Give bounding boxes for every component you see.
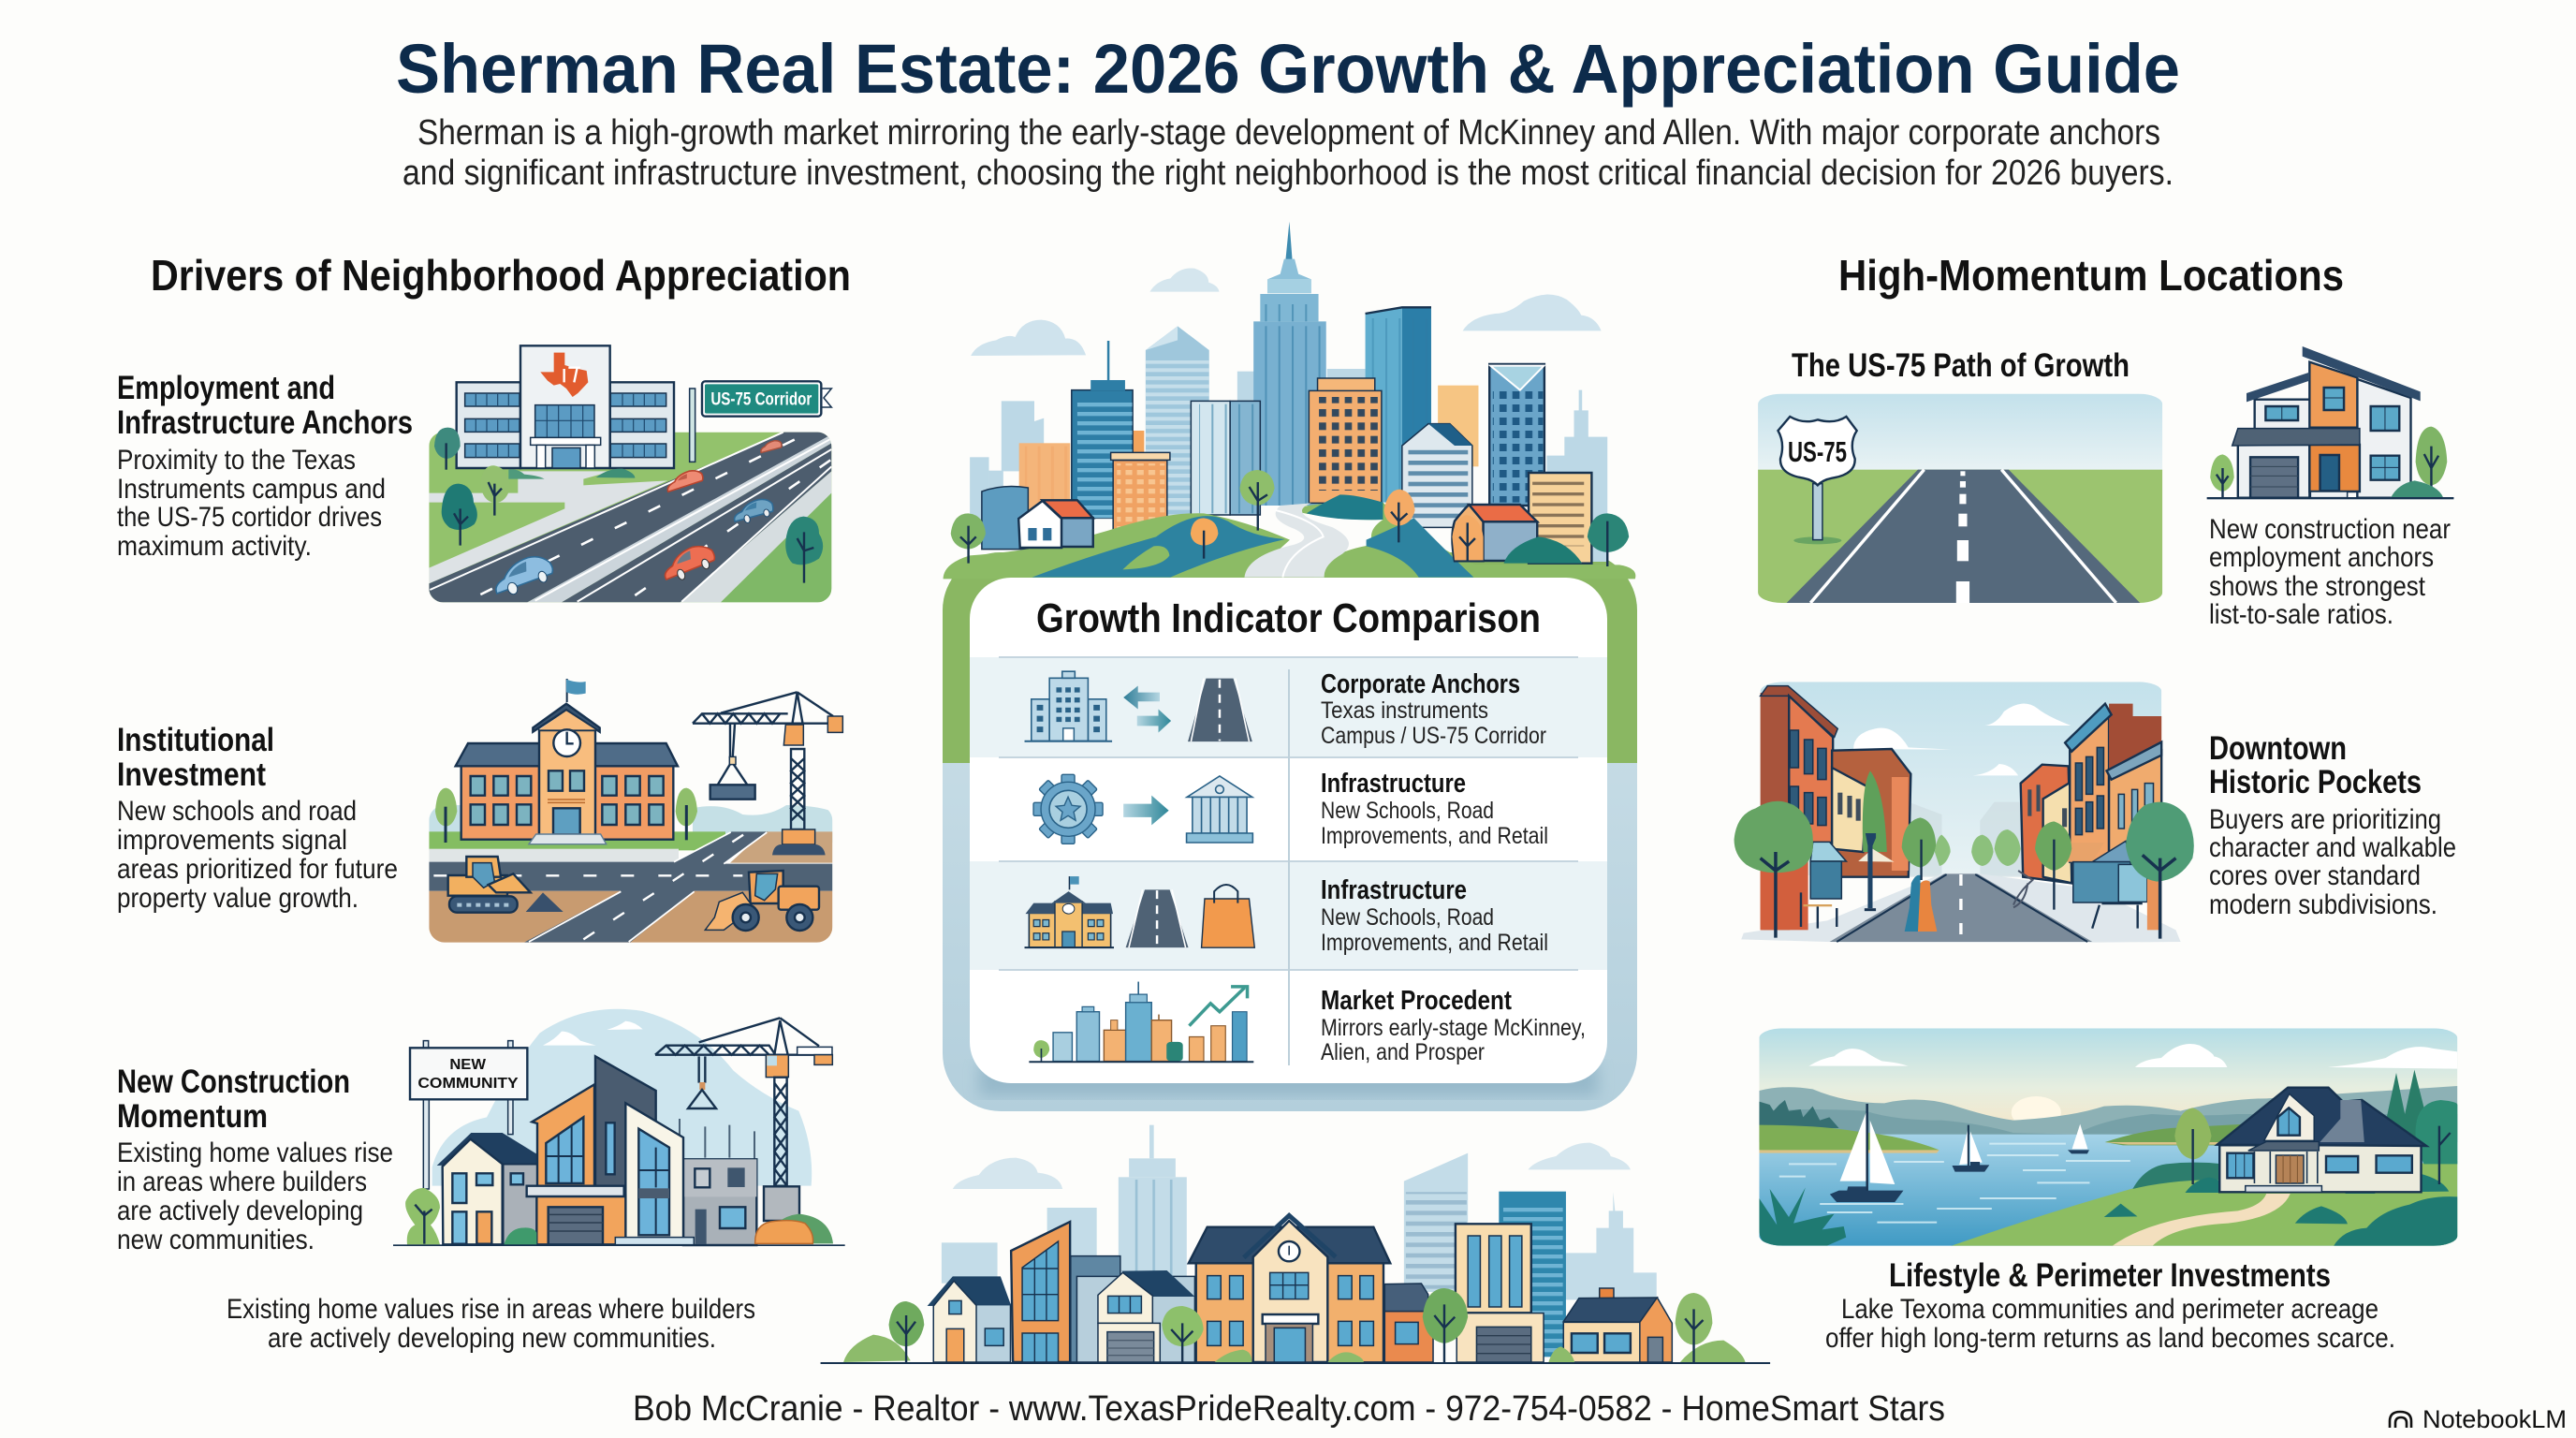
illustration: modern house xyxy=(2207,346,2453,499)
illustration: neighbourhood street xyxy=(821,1125,1770,1364)
row text: infrastructure: Infrastructure xyxy=(1321,769,1466,799)
text block: new construction momentum: New Construction xyxy=(117,1064,350,1100)
text block: lifestyle and perimeter investments: Lake Texoma communities and perimeter acreage xyxy=(1841,1294,2378,1325)
text block: employment anchors: maximum activity. xyxy=(117,531,312,562)
text block: new construction list-to-sale: shows the strongest xyxy=(2209,571,2426,602)
text block: lifestyle and perimeter investments xyxy=(1825,1257,2395,1354)
text block: institutional investment: areas prioritized for future xyxy=(117,854,398,885)
text block: employment anchors: the US-75 cortidor drives xyxy=(117,502,382,533)
text block: employment anchors: Proximity to the Texas xyxy=(117,445,356,476)
illustration: campus and highway: US-75 Corridor xyxy=(710,390,812,410)
text block: institutional investment: Investment xyxy=(117,756,266,793)
text block: US-75 heading: The US-75 Path of Growth xyxy=(1792,347,2130,384)
text block: new construction momentum: are actively developing xyxy=(117,1196,363,1226)
title: Sherman Real Estate: 2026 Growth & Appreciation Guide xyxy=(396,30,2180,108)
text block: new construction momentum xyxy=(117,1064,393,1255)
text block: downtown historic pockets: Historic Pockets xyxy=(2209,764,2422,800)
intro paragraph xyxy=(402,113,2174,193)
row text: corporate anchors xyxy=(1321,669,1546,749)
text block: institutional investment: property value growth. xyxy=(117,883,359,914)
bottom-left caption: are actively developing new communities. xyxy=(268,1323,716,1354)
illustration: lake perimeter xyxy=(1759,1028,2457,1248)
text block: new construction momentum: Momentum xyxy=(117,1098,268,1135)
text block: institutional investment: New schools and road xyxy=(117,796,357,827)
text block: new construction momentum: in areas where builders xyxy=(117,1167,367,1197)
illustration: city skyline xyxy=(944,222,1635,579)
heading: high-momentum locations: High-Momentum Locations xyxy=(1838,251,2344,300)
text block: lifestyle and perimeter investments: offer high long-term returns as land becomes scarce. xyxy=(1825,1323,2395,1354)
text block: employment anchors: Infrastructure Anchors xyxy=(117,404,413,441)
row text: infrastructure: Improvements, and Retail xyxy=(1321,823,1548,849)
row text: corporate anchors: Texas instruments xyxy=(1321,697,1488,724)
text block: institutional investment: improvements signal xyxy=(117,825,347,856)
icon: office and road xyxy=(1025,671,1252,741)
text block: downtown historic pockets: Downtown xyxy=(2209,730,2347,767)
bottom-left caption xyxy=(227,1294,755,1354)
text block: new construction list-to-sale: employment anchors xyxy=(2209,542,2434,573)
text block: employment anchors xyxy=(117,370,413,562)
text block: downtown historic pockets xyxy=(2209,730,2456,920)
illustration: new community construction: NEW xyxy=(449,1057,487,1073)
text block: institutional investment xyxy=(117,722,398,914)
text block: new construction list-to-sale: list-to-sale ratios. xyxy=(2209,599,2393,630)
icon: school, road and shopping bag xyxy=(1025,876,1254,947)
text block: downtown historic pockets: cores over standard xyxy=(2209,860,2421,891)
text block: new construction list-to-sale: New construction near xyxy=(2209,514,2451,545)
illustration: school and road works xyxy=(429,679,842,944)
text block: new construction list-to-sale xyxy=(2209,514,2451,630)
illustration: US-75 road xyxy=(1758,394,2162,604)
row text: infrastructure: New Schools, Road xyxy=(1321,798,1494,824)
panel frame behind comparison card xyxy=(943,552,1637,1111)
illustration: downtown street xyxy=(1734,682,2194,943)
NotebookLM watermark: NotebookLM xyxy=(2422,1405,2567,1433)
row text: market precedent: Alien, and Prosper xyxy=(1321,1039,1485,1065)
icon: skyline and growth chart xyxy=(1029,982,1253,1062)
row icons xyxy=(1025,671,1254,1062)
row text: infrastructure repeat: Improvements, and Retail xyxy=(1321,930,1548,956)
text block: downtown historic pockets: modern subdivisions. xyxy=(2209,889,2437,920)
icon: gear and civic building xyxy=(1033,774,1252,844)
row text: infrastructure repeat: Infrastructure xyxy=(1321,875,1467,905)
text block: downtown historic pockets: character and walkable xyxy=(2209,832,2456,863)
row text: infrastructure repeat xyxy=(1321,875,1548,956)
row text: corporate anchors: Campus / US-75 Corridor xyxy=(1321,723,1546,749)
text block: employment anchors: Employment and xyxy=(117,370,335,406)
row text: corporate anchors: Corporate Anchors xyxy=(1321,669,1520,699)
row text: infrastructure xyxy=(1321,769,1548,849)
footer contact line: Bob McCranie - Realtor - www.TexasPrideRealty.com - 972-754-0582 - HomeSmart Stars xyxy=(633,1389,1945,1429)
text block: downtown historic pockets: Buyers are prioritizing xyxy=(2209,804,2441,835)
row text: market precedent: Market Procedent xyxy=(1321,986,1512,1016)
heading: drivers: Drivers of Neighborhood Appreciation xyxy=(151,251,851,300)
row text: market precedent xyxy=(1321,986,1586,1065)
illustration: campus and highway xyxy=(429,345,831,602)
text block: lifestyle and perimeter investments: Lifestyle & Perimeter Investments xyxy=(1889,1257,2331,1294)
text block: employment anchors: Instruments campus and xyxy=(117,474,386,505)
panel: growth indicator comparison xyxy=(970,578,1607,1096)
text block: new construction momentum: Existing home values rise xyxy=(117,1137,393,1168)
card heading: Growth Indicator Comparison xyxy=(1036,595,1541,641)
shield label: US-75 xyxy=(1788,435,1847,468)
text block: new construction momentum: new communities. xyxy=(117,1225,315,1255)
illustration: new community construction xyxy=(393,1009,845,1246)
intro paragraph: and significant infrastructure investment, choosing the right neighborhood is the most critical financial decision for 2026 buyers. xyxy=(402,154,2174,193)
row text: infrastructure repeat: New Schools, Road xyxy=(1321,904,1494,931)
bottom-left caption: Existing home values rise in areas where builders xyxy=(227,1294,755,1325)
text block: institutional investment: Institutional xyxy=(117,722,274,758)
intro paragraph: Sherman is a high-growth market mirroring the early-stage development of McKinney and Allen. With major corporate anchors xyxy=(417,113,2160,153)
illustration: new community construction: COMMUNITY xyxy=(417,1076,519,1092)
row text: market precedent: Mirrors early-stage McKinney, xyxy=(1321,1015,1586,1041)
